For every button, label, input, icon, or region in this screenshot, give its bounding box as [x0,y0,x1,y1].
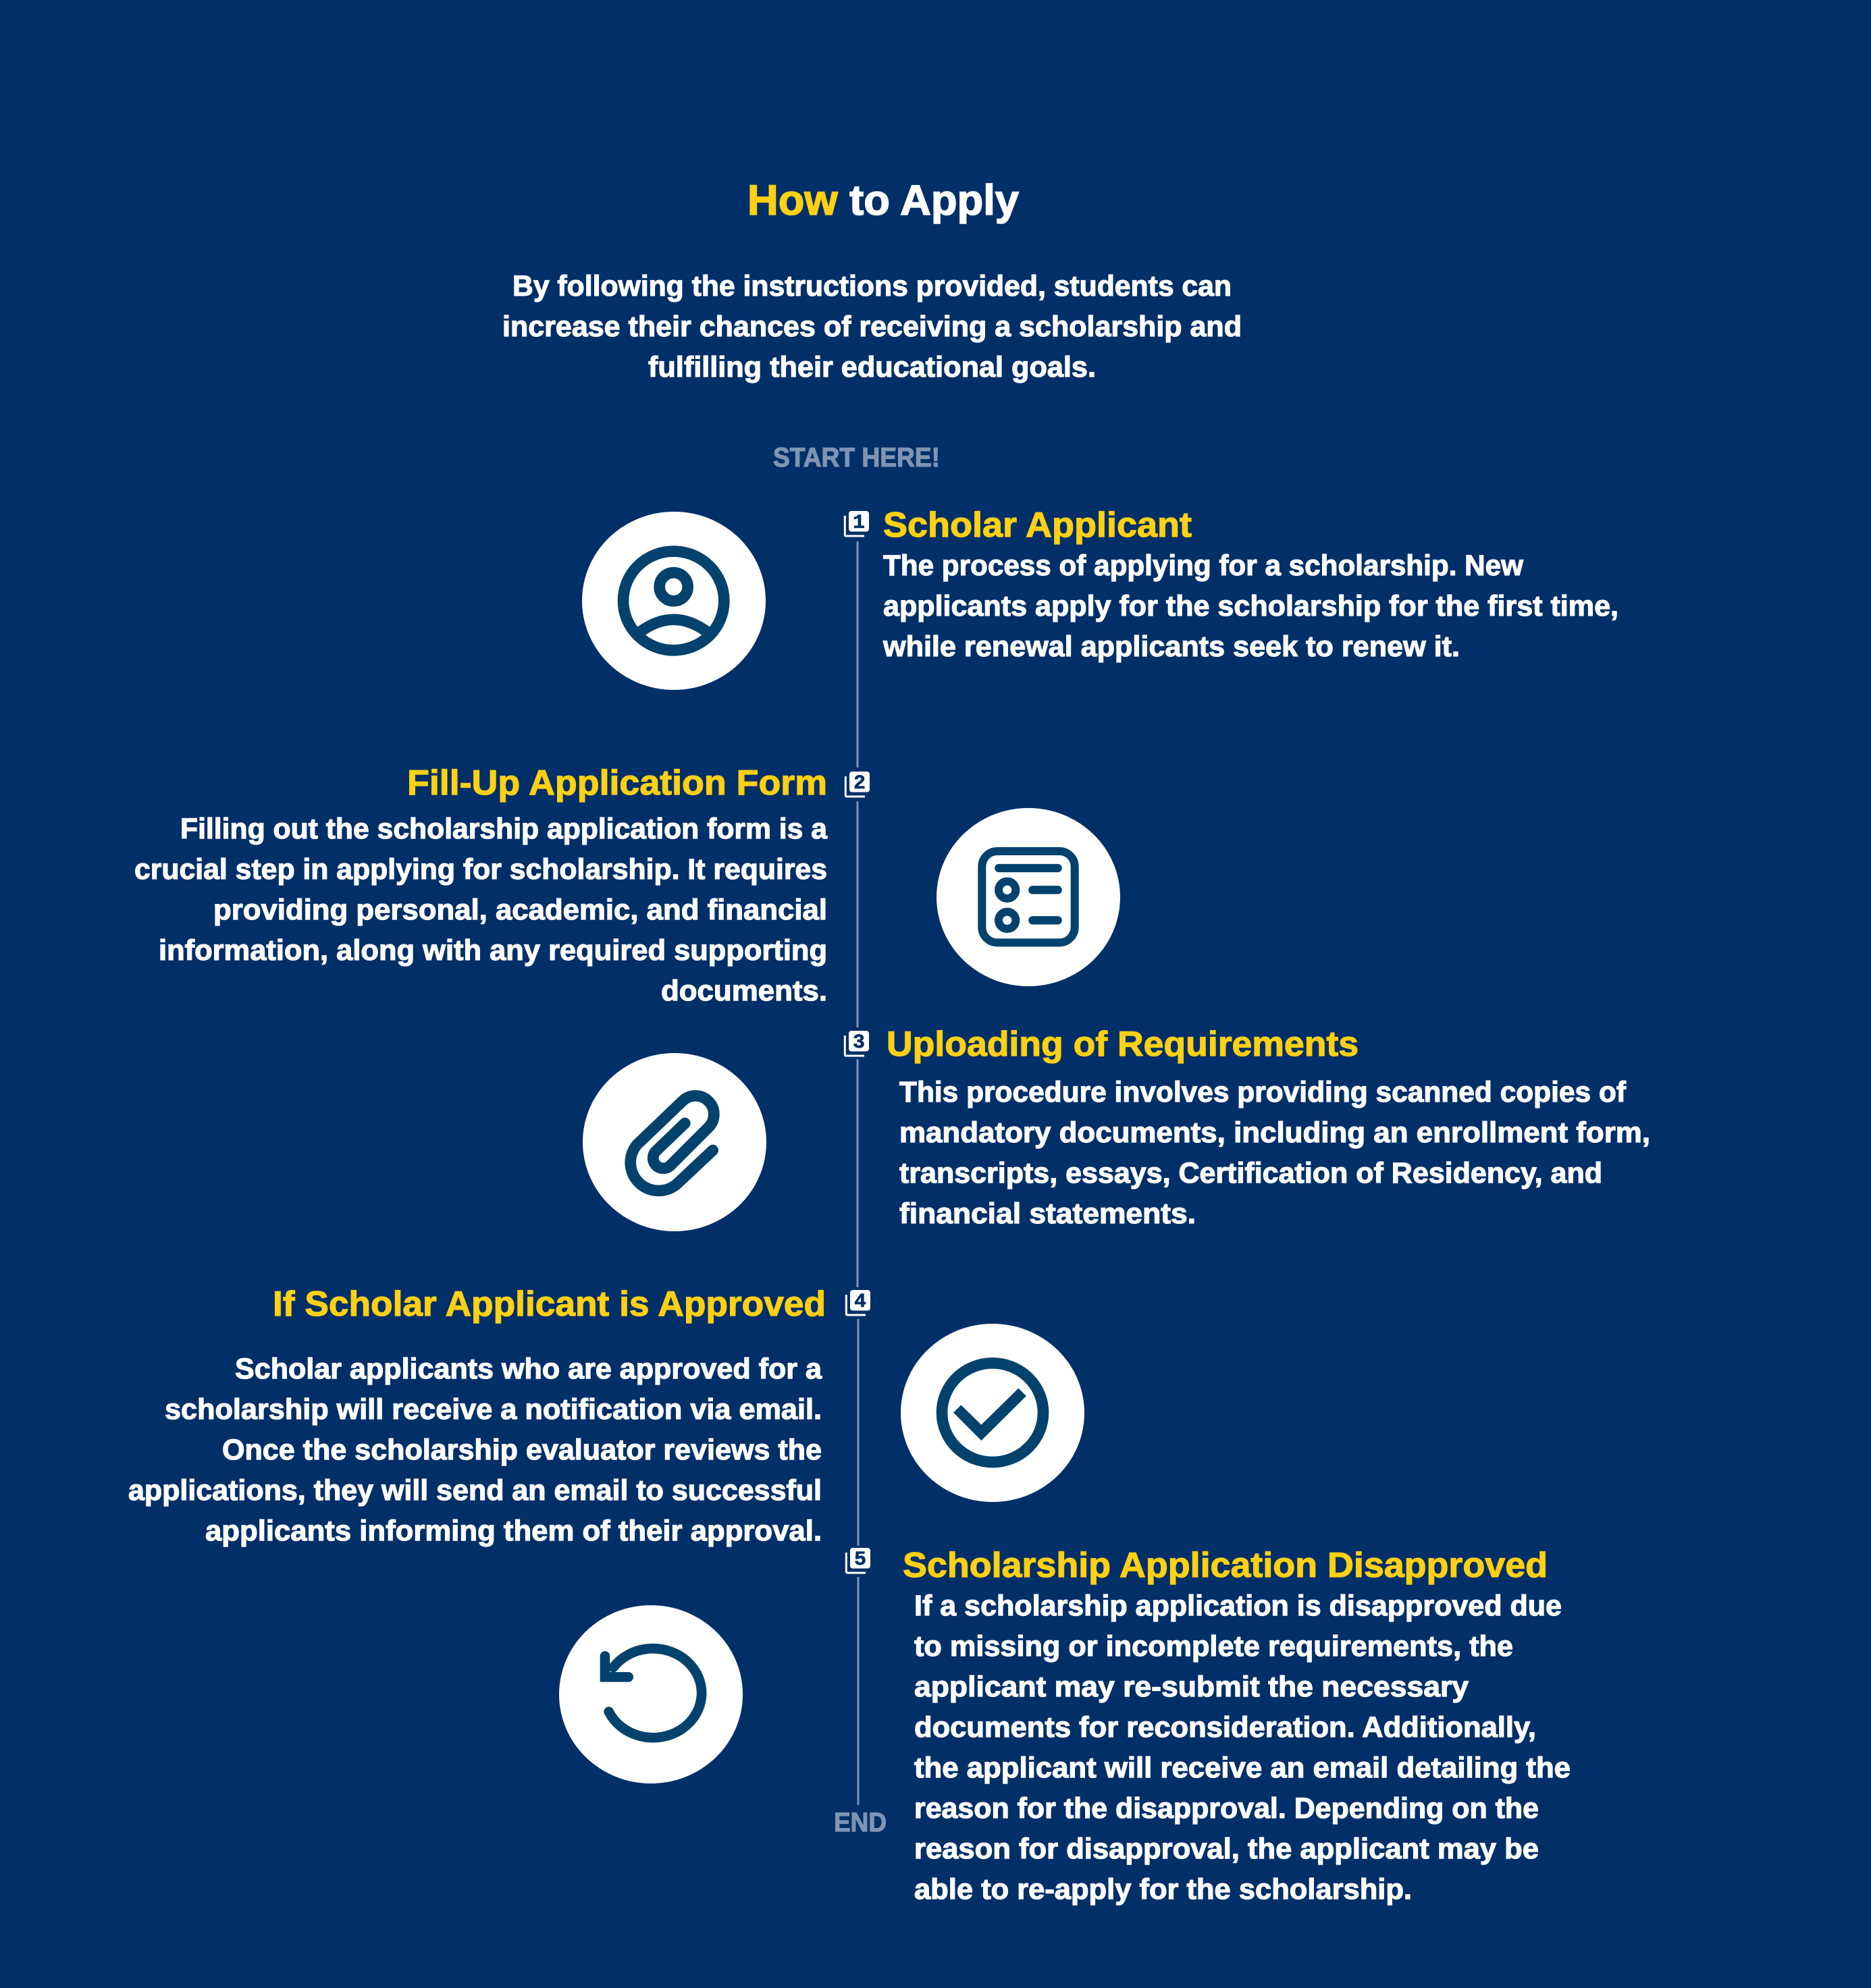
step 3 heading: Uploading of Requirements [887,1025,1359,1064]
title: How to Apply [747,177,1019,224]
step 5 text: applicant may re-submit the necessary [914,1671,1469,1703]
step 5 number badge: 5 [854,1549,866,1571]
end label: END [834,1808,887,1837]
step 3 number badge: 3 [853,1031,865,1054]
step 2 text: providing personal, academic, and financial [213,894,827,926]
step 3 text [899,1076,1650,1230]
step 1 text: while renewal applicants seek to renew it. [882,630,1460,663]
step 2 text: information, along with any required supporting [159,934,827,967]
intro text: By following the instructions provided, students can [512,270,1232,302]
step 3 icon: paperclip [583,1053,766,1231]
step 1 text: The process of applying for a scholarship. New [883,549,1524,582]
step 2 text: crucial step in applying for scholarship. It requires [134,853,827,886]
step 5 text: reason for the disapproval. Depending on the [914,1792,1539,1825]
step 1 text [882,549,1618,663]
step 3 text: financial statements. [899,1198,1196,1230]
step 4 heading: If Scholar Applicant is Approved [273,1285,826,1324]
step 5 text: If a scholarship application is disapproved due [914,1590,1562,1622]
step 4 icon: check mark in circle [901,1324,1084,1502]
step 4 text: applications, they will send an email to successful [128,1474,822,1507]
step 5 text [914,1590,1571,1906]
step 2 number badge: 2 [853,772,866,795]
step 3 number badge [845,1031,869,1056]
step 4 text: Once the scholarship evaluator reviews the [222,1434,822,1466]
step 5 text: documents for reconsideration. Additionally, [914,1711,1536,1744]
step 5 text: reason for disapproval, the applicant may be [914,1833,1539,1865]
step 4 text: applicants informing them of their approval. [205,1515,822,1547]
step 1 number badge [845,511,869,536]
step 4 number badge [846,1290,870,1315]
step 3 text: transcripts, essays, Certification of Residency, and [899,1157,1602,1189]
step 3 text: This procedure involves providing scanned copies of [899,1076,1627,1108]
step 3 text: mandatory documents, including an enrollment form, [899,1117,1650,1149]
step 2 text: documents. [661,975,827,1007]
step 4 number badge: 4 [854,1291,866,1314]
step 1 text: applicants apply for the scholarship for the first time, [883,590,1618,622]
step 4 text: scholarship will receive a notification via email. [165,1393,822,1426]
step 5 heading: Scholarship Application Disapproved [903,1546,1548,1585]
step 2 icon: form list [937,808,1120,986]
step 4 text [128,1353,822,1547]
step 5 number badge [846,1548,870,1573]
step 2 heading: Fill-Up Application Form [407,763,827,803]
intro text: fulfilling their educational goals. [648,351,1096,383]
step 2 number badge [845,772,870,797]
step 1 number badge: 1 [853,512,865,535]
intro text [502,270,1242,383]
step 5 text: the applicant will receive an email detailing the [914,1752,1571,1784]
step 1 icon: person in circle [582,512,766,690]
step 5 text: able to re-apply for the scholarship. [914,1873,1412,1906]
start label: START HERE! [773,443,940,473]
step 5 icon: undo arrow [559,1605,743,1783]
step 5 text: to missing or incomplete requirements, the [914,1630,1513,1663]
intro text: increase their chances of receiving a scholarship and [502,311,1242,343]
step 1 heading: Scholar Applicant [883,506,1192,545]
step 4 text: Scholar applicants who are approved for a [235,1353,822,1385]
step 2 text [134,813,828,1007]
step 2 text: Filling out the scholarship application form is a [180,813,828,845]
